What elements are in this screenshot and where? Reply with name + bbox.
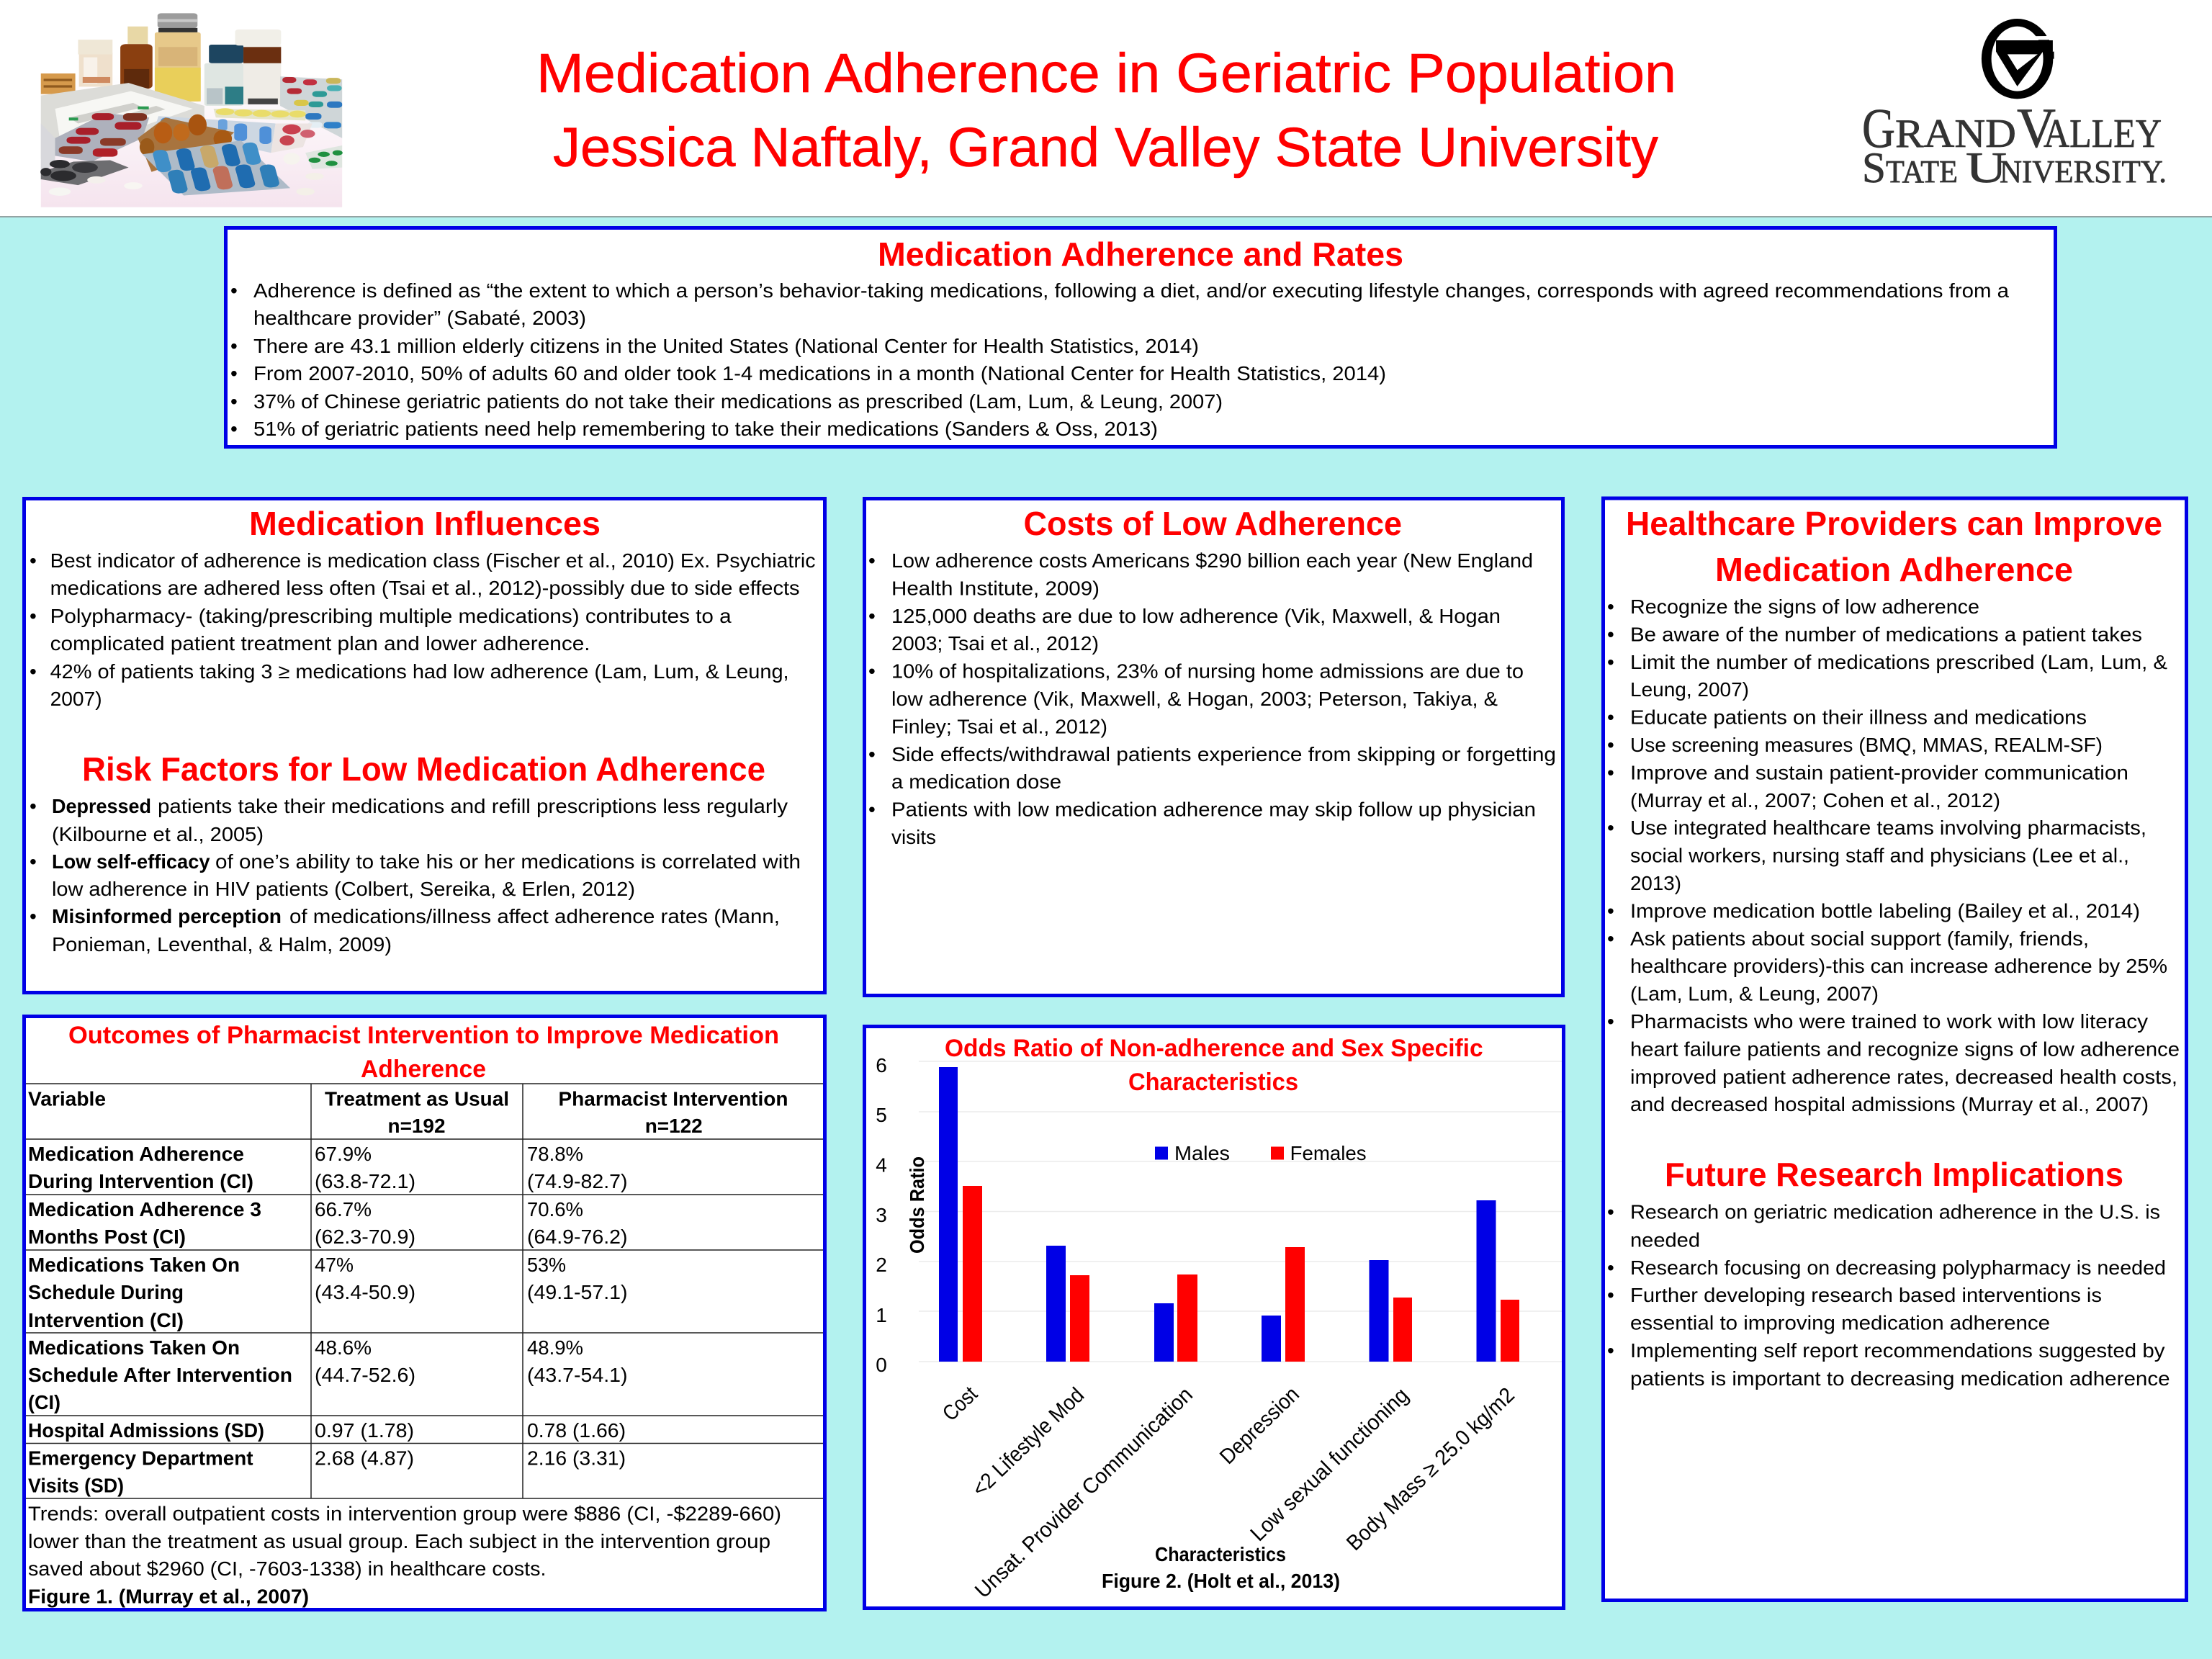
bullet list: risk factors: Low self-efficacy [52,850,210,873]
x axis category labels: Cost [938,1382,982,1426]
bullet list: influences: • [30,549,37,572]
bullet list: Side effects/withdrawal patients experience from skipping or forgetting [891,743,1556,765]
bullet list: provider actions: Improve and sustain patient-provider communication [1630,761,2128,783]
bullet list: influences: medications are adhered less often (Tsai et al., 2012)-possibly due to side effects [50,577,800,599]
x axis category labels: Unsat. Provider Communication [971,1382,1197,1603]
bars: Cost [939,1067,982,1362]
bullet list: provider actions: Pharmacists who were trained to work with low literacy [1630,1010,2148,1033]
bullet list: risk factors [30,795,801,956]
bullet list: provider actions: and decreased hospital admissions (Murray et al., 2007) [1630,1093,2149,1115]
title [536,42,1676,179]
title: Jessica Naftaly, Grand Valley State University [553,117,1658,179]
image: assorted medications [40,13,343,207]
bullet list [868,549,1556,848]
bullet list: 125,000 deaths are due to low adherence (Vik, Maxwell, & Hogan [891,605,1501,627]
table row: on schedule during intervention: Medications Taken On [28,1254,240,1276]
y axis tick labels: 3 [876,1204,887,1226]
bullet list: risk factors: • [30,905,37,927]
bullet list: future research: • [1607,1284,1614,1306]
logo: Grand Valley State University [1862,19,2167,192]
bullet list: 51% of geriatric patients need help remembering to take their medications (Sanders & Oss, 2013) [253,418,1158,440]
bullet list: provider actions: social workers, nursing staff and physicians (Lee et al., [1630,845,2129,867]
table header row: Variable [28,1087,106,1110]
legend [1155,1142,1367,1164]
logo wordmark: ALLEY [2044,112,2162,156]
bullet list: Finley; Tsai et al., 2012) [891,715,1107,737]
heading: Healthcare Providers can Improve Medication Adherence: Healthcare Providers can Improve [1626,505,2162,542]
table header row: n=122 [645,1115,703,1137]
logo wordmark [1862,96,2167,192]
bullet list: influences: Best indicator of adherence is medication class (Fischer et al., 2010) Ex. Psychiatric [50,549,816,572]
bullet list: From 2007-2010, 50% of adults 60 and older took 1-4 medications in a month (National Center for Health Statistics, 2014) [253,362,1386,385]
bullet list: provider actions: Improve medication bottle labeling (Bailey et al., 2014) [1630,899,2140,922]
logo wordmark: S [1862,144,1886,192]
bullet list [230,279,2009,440]
table row: on schedule after intervention: 48.6% [315,1336,372,1359]
table row: on schedule during intervention: 47% [315,1254,354,1276]
table row: on schedule during intervention: (49.1-57.1) [527,1281,628,1303]
table row: adherence during intervention [28,1143,628,1192]
table row: adherence 3 months post: 70.6% [527,1198,583,1220]
chart title [945,1035,1483,1096]
y axis tick labels: 1 [876,1304,887,1326]
y axis tick labels: 6 [876,1054,887,1076]
figure 2 caption: Figure 2. (Holt et al., 2013) [1102,1570,1340,1592]
bullet list: future research: essential to improving medication adherence [1630,1312,2050,1334]
bullet list: future research: • [1607,1339,1614,1362]
bullet list: future research: patients is important to decreasing medication adherence [1630,1367,2170,1390]
heading: Medication Influences: Medication Influences [249,505,601,542]
bullet list: provider actions: • [1607,651,1614,673]
table row: on schedule after intervention: (44.7-52.6) [315,1364,415,1386]
table row: on schedule during intervention [28,1254,628,1331]
table row: on schedule after intervention [28,1336,628,1413]
bullet list: influences: 2007) [50,688,102,710]
legend: Females [1290,1142,1367,1164]
bullet list: provider actions: Be aware of the number of medications a patient takes [1630,623,2142,645]
x axis category labels: <2 Lifestyle Mod [968,1383,1089,1501]
panel: Costs of Low Adherence [864,498,1563,995]
bullet list: • [230,362,238,385]
heading: Future Research Implications: Future Research Implications [1665,1156,2123,1193]
bullet list: future research: Research on geriatric medication adherence in the U.S. is [1630,1201,2160,1223]
table row: adherence during intervention: 67.9% [315,1143,372,1165]
table row: on schedule after intervention: Schedule After Intervention [28,1364,292,1386]
bullet list: future research: • [1607,1201,1614,1223]
logo wordmark: G [1862,96,1895,159]
bullet list: future research: • [1607,1256,1614,1279]
bullet list: There are 43.1 million elderly citizens in the United States (National Center for Health Statistics, 2014) [253,335,1199,357]
y axis tick labels [876,1054,887,1376]
title: Medication Adherence in Geriatric Population [536,42,1676,104]
bullet list: provider actions: • [1607,899,1614,922]
bullet list: risk factors: of medications/illness affect adherence rates (Mann, [289,905,780,927]
table header row: Pharmacist Intervention [559,1087,788,1110]
table row: on schedule after intervention: 48.9% [527,1336,583,1359]
bullet list: Low adherence costs Americans $290 billion each year (New England [891,549,1533,572]
y axis tick labels: 4 [876,1154,887,1177]
table row: adherence 3 months post [28,1198,628,1248]
bullet list: provider actions: Use integrated healthcare teams involving pharmacists, [1630,817,2146,839]
table row: emergency department visits: Emergency Department [28,1447,253,1470]
table header row: Treatment as Usual [325,1087,509,1110]
header band [0,0,2212,217]
table row: hospital admissions: 0.78 (1.66) [527,1419,626,1442]
bullet list: future research: Further developing research based interventions is [1630,1284,2102,1306]
icon: GV emblem [1982,19,2054,99]
bullet list: • [230,279,238,302]
bullet list: 2003; Tsai et al., 2012) [891,632,1099,655]
bullet list: • [230,335,238,357]
table trends note: lower than the treatment as usual group. Each subject in the intervention group [28,1530,770,1552]
table row: emergency department visits: 2.68 (4.87) [315,1447,414,1470]
bullet list: provider actions: • [1607,1010,1614,1033]
heading: Costs of Low Adherence [1024,505,1402,542]
table trends note: saved about $2960 (CI, -7603-1338) in healthcare costs. [28,1557,546,1580]
table trends note [28,1502,781,1580]
logo wordmark: V [2017,96,2056,159]
bullet list: provider actions: 2013) [1630,872,1681,894]
bullet list: low adherence (Vik, Maxwell, & Hogan, 2003; Peterson, Takiya, & [891,688,1498,710]
y axis tick labels: 5 [876,1104,887,1126]
panel: Medication Influences and Risk Factors [24,498,825,992]
logo wordmark: NIVERSITY. [2000,154,2167,189]
table row: adherence during intervention: During Intervention (CI) [28,1170,253,1192]
table row: hospital admissions [28,1419,626,1442]
x axis category labels: Low sexual functioning [1246,1383,1413,1546]
table row: adherence during intervention: (63.8-72.1) [315,1170,415,1192]
table heading [68,1022,779,1083]
logo wordmark: U [1966,144,2007,192]
heading: Medication Adherence and Rates [878,235,1403,273]
logo wordmark: TATE [1886,154,1958,189]
table grid [26,1084,823,1498]
bullet list: influences: 42% of patients taking 3 ≥ medications had low adherence (Lam, Lum, & Leung, [50,660,789,683]
bars: Low sexual functioning [1370,1260,1412,1362]
x axis title: Characteristics [1155,1543,1286,1565]
table trends note: Trends: overall outpatient costs in intervention group were $886 (CI, -$2289-660) [28,1502,781,1525]
bullet list: • [868,660,876,683]
heading: Risk Factors for Low Medication Adherence: Risk Factors for Low Medication Adherence [82,750,765,788]
table row: adherence during intervention: Medication Adherence [28,1143,244,1165]
bullet list: risk factors: Ponieman, Leventhal, & Halm, 2009) [52,933,392,956]
bullet list: future research [1607,1201,2170,1390]
table row: adherence 3 months post: Medication Adherence 3 [28,1198,261,1220]
bullet list: provider actions: • [1607,734,1614,756]
bullet list: provider actions: Limit the number of medications prescribed (Lam, Lum, & [1630,651,2167,673]
figure 1 caption: Figure 1. (Murray et al., 2007) [28,1586,309,1608]
y axis tick labels: 2 [876,1254,887,1276]
bars: Depression [1262,1247,1305,1362]
bullet list: • [230,390,238,413]
bullet list: influences: Polypharmacy- (taking/prescribing multiple medications) contributes to a [50,605,732,627]
bullet list: risk factors: • [30,850,37,873]
heading: Healthcare Providers can Improve Medication Adherence [1626,505,2162,588]
table row: hospital admissions: 0.97 (1.78) [315,1419,414,1442]
bullet list: a medication dose [891,770,1061,793]
chart title: Characteristics [1128,1069,1298,1096]
bullet list: provider actions: healthcare providers)-this can increase adherence by 25% [1630,955,2167,977]
bullet list: 10% of hospitalizations, 23% of nursing home admissions are due to [891,660,1524,683]
bars: Lifestyle Mod [1046,1246,1089,1362]
table header row: n=192 [387,1115,445,1137]
bullet list: visits [891,826,936,848]
table row: hospital admissions: Hospital Admissions (SD) [28,1419,264,1442]
bullet list: provider actions: Use screening measures (BMQ, MMAS, REALM-SF) [1630,734,2103,756]
bullet list: influences [30,549,816,710]
bullet list: • [868,799,876,821]
bullet list: provider actions: • [1607,927,1614,950]
table row: adherence during intervention: (74.9-82.7) [527,1170,628,1192]
bullet list: • [868,549,876,572]
bullet list: healthcare provider” (Sabaté, 2003) [253,307,586,329]
bullet list: provider actions: (Murray et al., 2007; Cohen et al., 2012) [1630,789,2000,811]
panel: Odds Ratio chart [864,1027,1564,1609]
bullet list: Adherence is defined as “the extent to which a person’s behavior-taking medications, following a diet, and/or executing lifestyle changes, corresponds with agreed recommendations from a [253,279,2009,302]
bullet list: 37% of Chinese geriatric patients do not take their medications as prescribed (Lam, Lum, & Leung, 2007) [253,390,1223,413]
bullet list: provider actions: heart failure patients and recognize signs of low adherence [1630,1038,2180,1060]
logo wordmark: RAND [1895,112,2016,156]
bullet list: provider actions: Educate patients on their illness and medications [1630,706,2087,729]
bullet list: risk factors: low adherence in HIV patients (Colbert, Sereika, & Erlen, 2012) [52,878,635,900]
table row: emergency department visits: Visits (SD) [28,1475,124,1496]
bullet list: • [868,605,876,627]
x axis category labels [938,1382,1519,1603]
bullet list: risk factors: of one’s ability to take his or her medications is correlated with [215,850,801,873]
table row: on schedule during intervention: Intervention (CI) [28,1309,184,1331]
panel: Outcomes of Pharmacist Intervention table [24,1017,825,1610]
bullet list: provider actions: Recognize the signs of low adherence [1630,595,1979,618]
bullet list: provider actions [1607,595,2180,1115]
bullet list: Health Institute, 2009) [891,577,1100,599]
table header row [28,1087,788,1137]
bullet list: risk factors: Misinformed perception [52,905,282,927]
bullet list: provider actions: (Lam, Lum, & Leung, 2007) [1630,983,1879,1005]
table row: adherence 3 months post: Months Post (CI) [28,1226,186,1248]
y axis title: Odds Ratio [906,1156,928,1254]
bullet list: risk factors: patients take their medications and refill prescriptions less regularly [158,795,788,817]
bullet list: provider actions: • [1607,817,1614,839]
bullet list: • [868,743,876,765]
table row: emergency department visits [28,1447,626,1496]
table row: on schedule during intervention: 53% [527,1254,566,1276]
y axis tick labels: 0 [876,1354,887,1376]
bars: Provider Communication [1154,1274,1197,1362]
table row: adherence 3 months post: 66.7% [315,1198,372,1220]
panel: Healthcare Providers and Future Research [1603,498,2186,1600]
grid lines [919,1061,1562,1362]
table row: adherence during intervention: 78.8% [527,1143,583,1165]
bullet list: future research: Implementing self report recommendations suggested by [1630,1339,2164,1362]
table row: adherence 3 months post: (64.9-76.2) [527,1226,628,1248]
bullet list: • [230,418,238,440]
bullet list: influences: • [30,605,37,627]
bullet list: risk factors: (Kilbourne et al., 2005) [52,823,264,845]
bullet list: risk factors: • [30,795,37,817]
heading: Healthcare Providers can Improve Medication Adherence: Medication Adherence [1715,551,2073,588]
x axis category labels: Body Mass ≥ 25.0 kg/m2 [1342,1383,1519,1555]
table heading: Adherence [361,1056,486,1083]
bullet list: provider actions: • [1607,595,1614,618]
bullet list: influences: complicated patient treatment plan and lower adherence. [50,632,590,655]
bullet list: provider actions: improved patient adherence rates, decreased health costs, [1630,1066,2177,1088]
table row: on schedule during intervention: Schedule During [28,1281,184,1303]
bullet list: Patients with low medication adherence may skip follow up physician [891,799,1536,821]
legend: Males [1174,1142,1230,1164]
bullet list: provider actions: • [1607,623,1614,645]
panel: Medication Adherence and Rates [226,228,2055,446]
table row: on schedule after intervention: (43.7-54.1) [527,1364,628,1386]
table row: emergency department visits: 2.16 (3.31) [527,1447,626,1470]
table heading: Outcomes of Pharmacist Intervention to Improve Medication [68,1022,779,1049]
bullet list: provider actions: • [1607,761,1614,783]
table row: on schedule after intervention: Medications Taken On [28,1336,240,1359]
table row: on schedule after intervention: (CI) [28,1391,60,1413]
bullet list: future research: needed [1630,1228,1700,1251]
x axis category labels: Depression [1215,1382,1304,1469]
bullet list: provider actions: • [1607,706,1614,729]
bars: Body Mass [1476,1200,1519,1362]
bullet list: risk factors: Depressed [52,795,151,817]
table row: adherence 3 months post: (62.3-70.9) [315,1226,415,1248]
bullet list: provider actions: Leung, 2007) [1630,678,1749,701]
bullet list: influences: • [30,660,37,683]
table row: on schedule during intervention: (43.4-50.9) [315,1281,415,1303]
bullet list: future research: Research focusing on decreasing polypharmacy is needed [1630,1256,2166,1279]
bullet list: provider actions: Ask patients about social support (family, friends, [1630,927,2089,950]
chart title: Odds Ratio of Non-adherence and Sex Specific [945,1035,1483,1062]
